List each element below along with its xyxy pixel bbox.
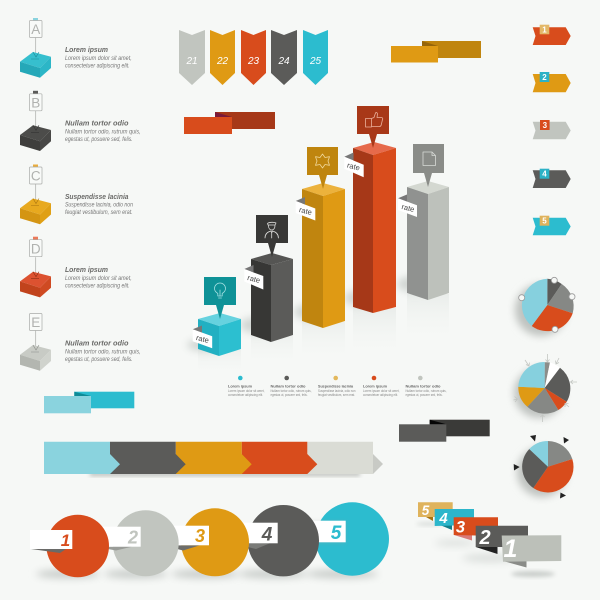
ribbon 3 xyxy=(454,517,498,540)
chart legend xyxy=(228,376,447,397)
bar 4 red: rate xyxy=(346,161,361,172)
ribbon: teal xyxy=(44,392,134,413)
3D bar chart xyxy=(187,106,449,376)
tab 23: 23 xyxy=(247,56,259,67)
legend item 2: Nullam tortor odio xyxy=(270,384,306,388)
ribbon 3: 3 xyxy=(456,518,465,536)
step list A-E xyxy=(20,18,141,371)
arrow tag 2 xyxy=(533,72,571,92)
bar 1 teal xyxy=(193,277,241,356)
step C: C xyxy=(31,168,41,184)
step E: E xyxy=(31,315,40,330)
bar 3 yellow: rate xyxy=(298,205,313,217)
bar 5 grey: rate xyxy=(401,202,415,214)
legend item 3: feugiat vestibulum, sem erat. xyxy=(318,393,355,397)
step A: Lorem ipsum xyxy=(65,45,108,54)
circle 5: 5 xyxy=(331,523,342,544)
arrow tag 2: 2 xyxy=(542,73,547,82)
circle 5 xyxy=(296,502,389,576)
process arrow bar xyxy=(44,442,383,476)
legend item 4 xyxy=(363,376,400,397)
arrow tag 3: 3 xyxy=(543,121,548,130)
ribbon 2 xyxy=(476,526,528,554)
step C: Suspendisse lacinia, odio non xyxy=(65,202,133,208)
step A xyxy=(20,18,132,78)
step D: Lorem ipsum xyxy=(65,265,108,274)
pie chart with dots xyxy=(515,277,575,336)
circle 1 xyxy=(30,515,109,577)
icon: light bulb xyxy=(214,283,226,298)
ribbon 1: 1 xyxy=(504,535,517,563)
arrow tag 1: 1 xyxy=(542,26,547,34)
ribbon: yellow xyxy=(391,41,481,62)
step A: Lorem ipsum dolor sit amet, xyxy=(65,55,132,62)
legend item 2 xyxy=(270,376,312,397)
step B xyxy=(20,91,141,151)
legend item 3 xyxy=(318,376,356,397)
legend item 2: egestas ut, posuere sed, felis. xyxy=(270,393,308,397)
bar 2 dark xyxy=(244,215,293,342)
arrow tag 4: 4 xyxy=(542,170,547,179)
numbered circles 1-5 xyxy=(30,502,389,578)
segment 3 xyxy=(176,442,252,474)
tab 21 xyxy=(179,30,205,85)
arrow tag 3 xyxy=(533,120,571,139)
segment 1 xyxy=(44,442,120,474)
pie chart with arrows xyxy=(514,354,577,422)
step A: consectetuer adipiscing elit. xyxy=(65,62,130,70)
segment 5 xyxy=(307,442,373,474)
legend item 5: Nullam tortor odio, rutrum quis, xyxy=(406,389,447,393)
circle 1: 1 xyxy=(61,531,70,550)
bar 5 grey xyxy=(398,144,449,300)
legend item 4: Lorem ipsum dolor sit amet, xyxy=(363,389,400,393)
step C: feugiat vestibulum, sem erat. xyxy=(65,209,133,216)
legend item 1 xyxy=(228,376,265,397)
legend item 3: Suspendisse lacinia xyxy=(318,384,354,388)
arrow tag 5 xyxy=(533,216,571,235)
tab 22 xyxy=(210,30,235,85)
arrow tag 4 xyxy=(533,169,571,188)
legend item 4: Lorem ipsum xyxy=(363,384,388,388)
step B: egestas ut, posuere sed, felis. xyxy=(65,136,133,143)
bar 3 yellow xyxy=(296,147,345,328)
tab 21: 21 xyxy=(185,56,198,67)
ribbon: red xyxy=(184,112,275,134)
stacked numbered ribbons xyxy=(416,502,561,577)
legend item 3: Suspendisse lacinia, odio non xyxy=(318,389,356,393)
ribbon 4 xyxy=(435,509,474,530)
legend item 5 xyxy=(406,376,447,397)
ribbon 5: 5 xyxy=(422,503,430,518)
bar 1 teal: rate xyxy=(195,333,210,345)
ribbon 5 xyxy=(418,502,453,521)
circle 4: 4 xyxy=(261,524,273,546)
step A: A xyxy=(31,22,40,37)
step D xyxy=(20,237,132,297)
ribbon: dark xyxy=(399,420,490,442)
tab 24 xyxy=(271,30,297,85)
step C: Suspendisse lacinia xyxy=(65,192,128,201)
circle 3 xyxy=(163,508,249,576)
segment 4 xyxy=(242,442,317,474)
step E: Nullam tortor odio xyxy=(65,338,129,347)
legend item 5: egestas ut, posuere sed, felis. xyxy=(406,393,443,397)
step D: Lorem ipsum dolor sit amet, xyxy=(65,275,132,282)
arrow tag 5: 5 xyxy=(542,217,547,226)
bar 4 red xyxy=(344,106,396,313)
ribbon 4: 4 xyxy=(438,510,448,527)
legend item 2: Nullam tortor odio, rutrum quis, xyxy=(270,389,312,393)
tab 25 xyxy=(303,30,328,85)
step B: B xyxy=(31,95,40,110)
tab 22: 22 xyxy=(216,56,228,67)
circle 2 xyxy=(96,510,179,576)
legend item 4: consectetuer adipiscing elit. xyxy=(363,393,398,397)
tab 23 xyxy=(241,30,266,85)
pie chart with triangles xyxy=(514,435,574,498)
circle 2: 2 xyxy=(127,528,138,548)
step D: consectetuer adipiscing elit. xyxy=(65,282,130,290)
ribbon 2: 2 xyxy=(478,527,491,549)
step E xyxy=(20,314,141,371)
step B: Nullam tortor odio, rutrum quis, xyxy=(65,128,141,135)
legend item 5: Nullam tortor odio xyxy=(406,384,441,388)
legend item 1: Lorem ipsum dolor sit amet, xyxy=(228,389,265,393)
numbered chevron tabs 21-25 xyxy=(179,30,328,85)
ribbon 1 xyxy=(502,535,561,568)
step E: egestas ut, posuere sed, felis. xyxy=(65,356,133,363)
arrow tag 1 xyxy=(533,25,571,45)
bar 2 dark: rate xyxy=(246,273,261,285)
step B: Nullam tortor odio xyxy=(65,119,129,128)
legend item 1: consectetuer adipiscing elit. xyxy=(228,393,263,397)
tab 24: 24 xyxy=(277,56,290,67)
segment 2 xyxy=(110,442,186,474)
step D: D xyxy=(31,242,41,257)
step C xyxy=(20,164,133,224)
tab 25: 25 xyxy=(309,56,321,67)
numbered arrow tags 1-5 xyxy=(533,25,571,235)
legend item 1: Lorem ipsum xyxy=(228,384,253,388)
circle 4 xyxy=(229,505,319,576)
circle 3: 3 xyxy=(195,526,205,546)
step E: Nullam tortor odio, rutrum quis, xyxy=(65,348,141,355)
